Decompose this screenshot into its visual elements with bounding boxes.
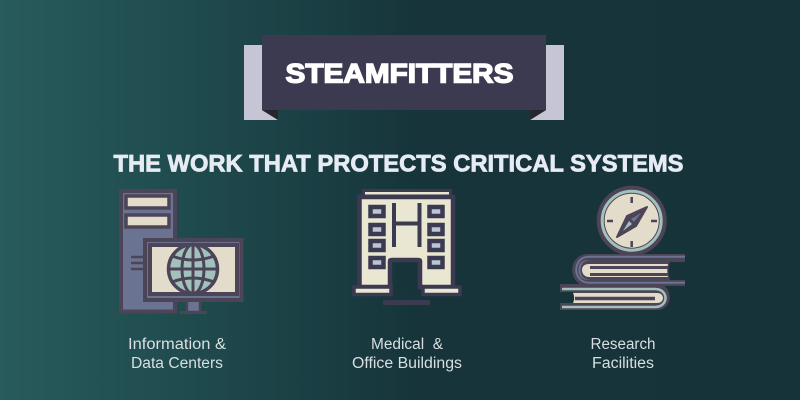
- server tower: [121, 191, 175, 312]
- icon: compass on books: [560, 188, 685, 310]
- drive bay bottom: [126, 215, 169, 227]
- monitor screen: [150, 245, 237, 294]
- door opening: [396, 264, 417, 290]
- right base: [423, 287, 460, 294]
- subtitle: THE WORK THAT PROTECTS CRITICAL SYSTEMS: [114, 150, 684, 177]
- drive bay top: [126, 196, 169, 208]
- label line 2: Facilities: [592, 355, 654, 372]
- bottom book: [560, 284, 670, 310]
- monitor frame: [145, 240, 242, 300]
- icon: computer with globe: [121, 191, 242, 314]
- stand foot: [180, 311, 207, 314]
- ground shadow: [383, 300, 430, 305]
- title banner: [244, 35, 564, 120]
- compass: [599, 188, 665, 254]
- banner title: STEAMFITTERS: [286, 58, 514, 88]
- label line 2: Office Buildings: [352, 355, 462, 372]
- top book: [572, 254, 685, 286]
- label: medical and office buildings: Medical &: [371, 336, 444, 353]
- right windows: [430, 207, 442, 267]
- right fold: [530, 110, 546, 120]
- label: information and data centers: Information &: [128, 336, 227, 353]
- left base: [354, 287, 391, 294]
- banner body: [262, 35, 546, 110]
- label line 2: Data Centers: [131, 355, 223, 372]
- letter H sign: [394, 203, 420, 247]
- left ribbon: [244, 45, 278, 120]
- building body: [360, 197, 453, 287]
- left fold: [262, 110, 278, 120]
- label: research facilities: Research: [590, 336, 656, 353]
- roof: [364, 190, 450, 196]
- tower vents: [131, 257, 145, 269]
- icon: office building: [354, 190, 460, 305]
- left windows: [370, 207, 384, 267]
- right ribbon: [530, 45, 564, 120]
- monitor stand: [187, 300, 200, 312]
- globe: [168, 244, 218, 294]
